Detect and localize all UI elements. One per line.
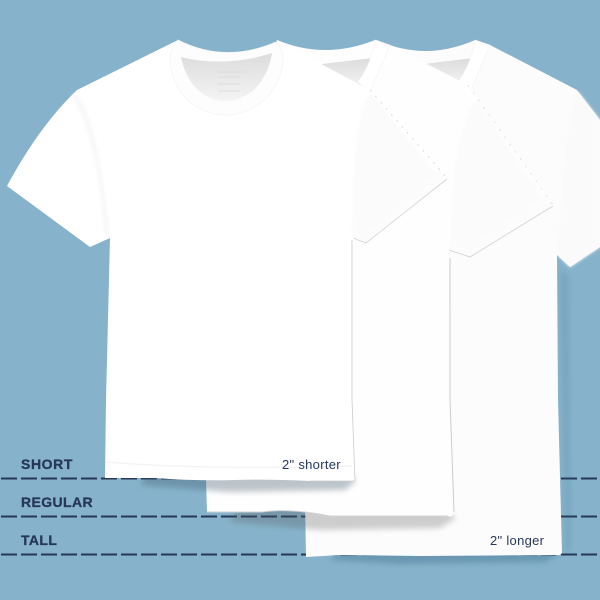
collar — [458, 40, 490, 92]
collar — [358, 40, 390, 92]
sleeve shading — [558, 92, 600, 267]
garment label — [217, 72, 246, 91]
collar rib — [170, 40, 283, 115]
note: 2 inches shorter: 2" shorter — [282, 457, 341, 472]
shirt: short (front) — [7, 40, 447, 492]
hem — [449, 196, 553, 258]
label: tall: TALL — [21, 532, 57, 548]
dashed line: regular — [1, 516, 600, 518]
shirt: tall (back) — [305, 40, 600, 564]
dashed line: tall — [1, 554, 600, 556]
left sleeve shading — [72, 94, 110, 238]
neck interior — [313, 58, 373, 88]
neck interior — [181, 53, 272, 101]
sleeve shading — [450, 100, 548, 255]
shirt: regular (middle) — [206, 40, 553, 530]
label: short: SHORT — [21, 456, 73, 472]
right sleeve shading — [352, 92, 440, 240]
label: regular: REGULAR — [21, 494, 93, 510]
note: 2 inches longer: 2" longer — [490, 533, 545, 548]
seams — [370, 90, 447, 178]
neck interior — [416, 58, 473, 85]
sleeve hem — [353, 170, 447, 243]
dashed line: short — [1, 478, 600, 480]
